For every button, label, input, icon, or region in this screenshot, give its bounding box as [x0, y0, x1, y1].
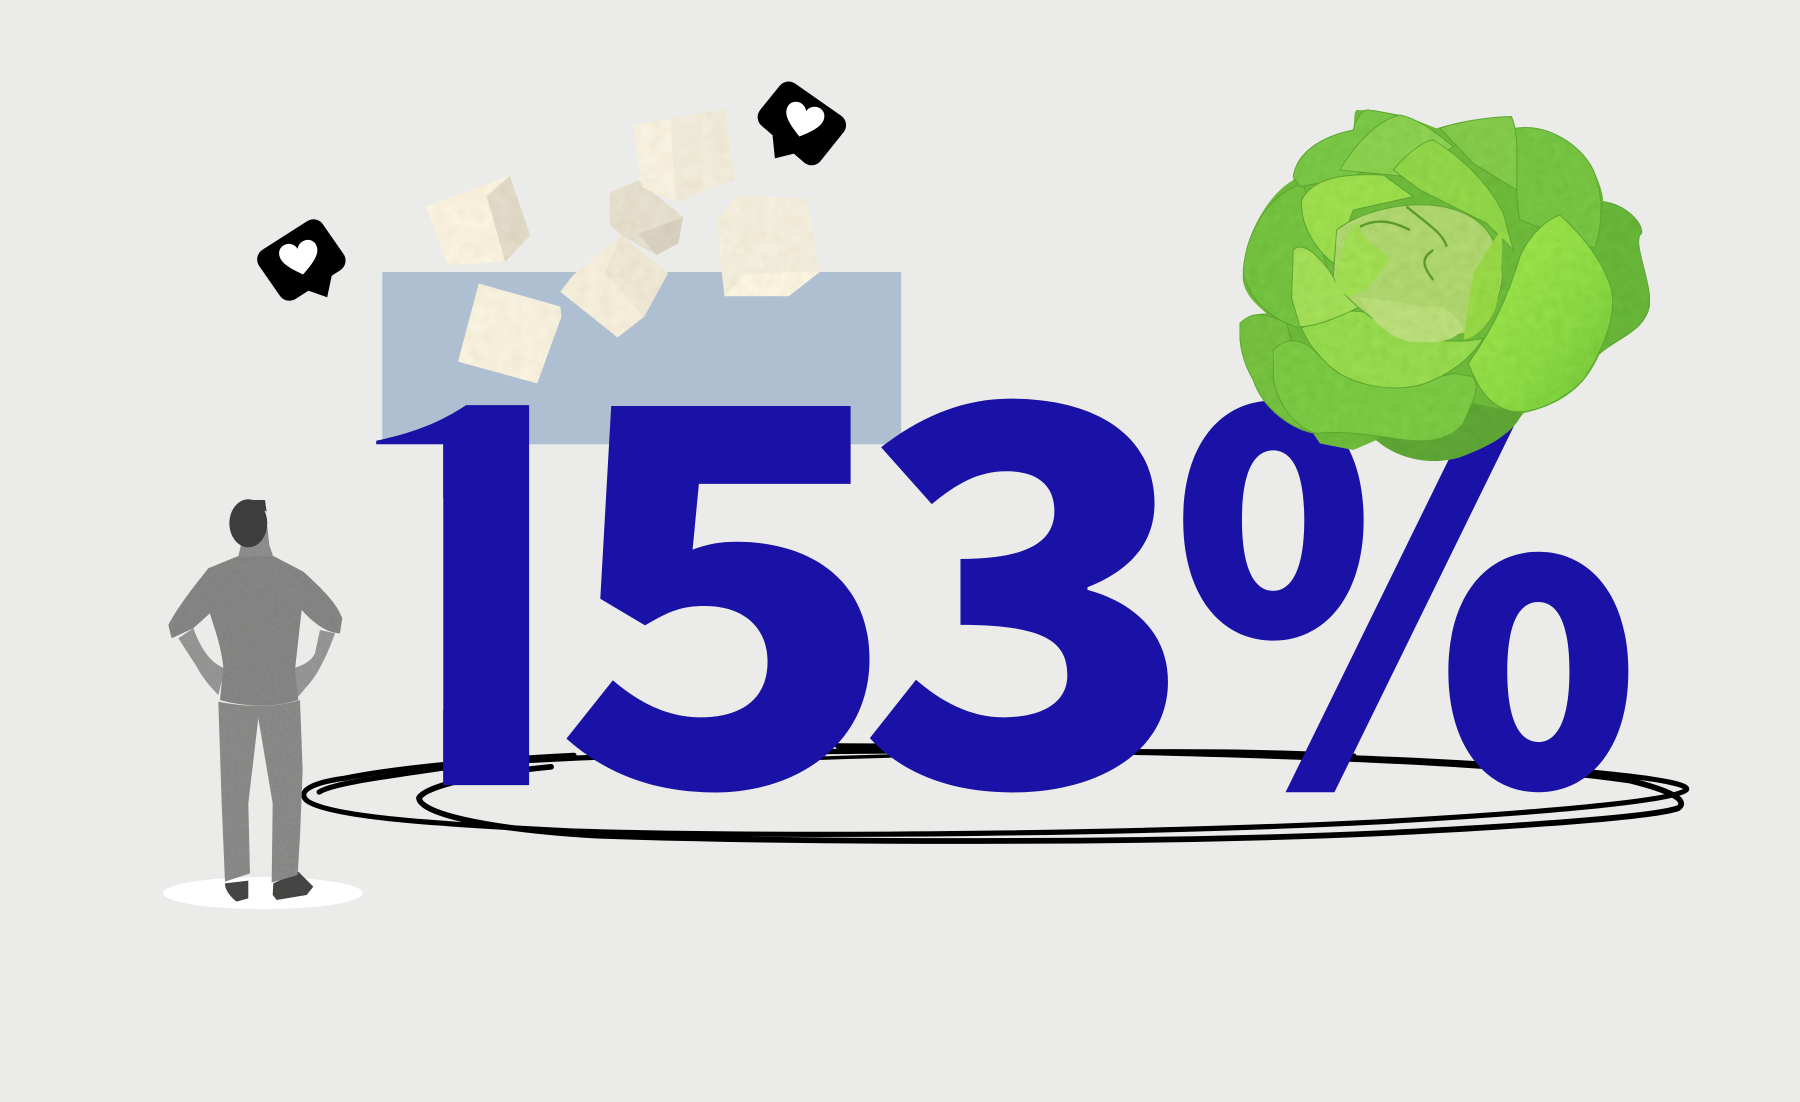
- big number: 153%: %: [1170, 198, 1642, 932]
- shoes: [225, 872, 313, 902]
- big number: 153%: [328, 178, 1642, 936]
- white floor ellipse: [163, 877, 363, 909]
- tofu cubes: [426, 109, 820, 383]
- big number: 153%: 3: [856, 180, 1199, 936]
- neck and head: [229, 499, 273, 557]
- scribbled ellipse: [304, 746, 1687, 841]
- icon: heart bubble left: [269, 231, 334, 297]
- tofu cube: lower left: [458, 284, 561, 383]
- tofu cube: centre: [560, 235, 668, 337]
- tofu cube: top: [634, 109, 735, 202]
- icon: heart bubble right: [769, 93, 835, 158]
- big number: 153%: 5: [552, 179, 901, 936]
- tofu cube: right: [716, 195, 820, 296]
- big number: 153%: 1: [328, 178, 626, 936]
- trousers: [218, 700, 303, 883]
- panel: blue rectangle: [382, 272, 901, 444]
- lettuce: [1240, 110, 1650, 461]
- forearms and hands: [178, 628, 335, 697]
- shirt: [168, 556, 342, 706]
- tofu cube: behind centre: [610, 180, 683, 255]
- man seen from behind: [168, 499, 342, 902]
- lettuce silhouette: [1240, 110, 1650, 461]
- tofu cube: upper left: [426, 176, 530, 265]
